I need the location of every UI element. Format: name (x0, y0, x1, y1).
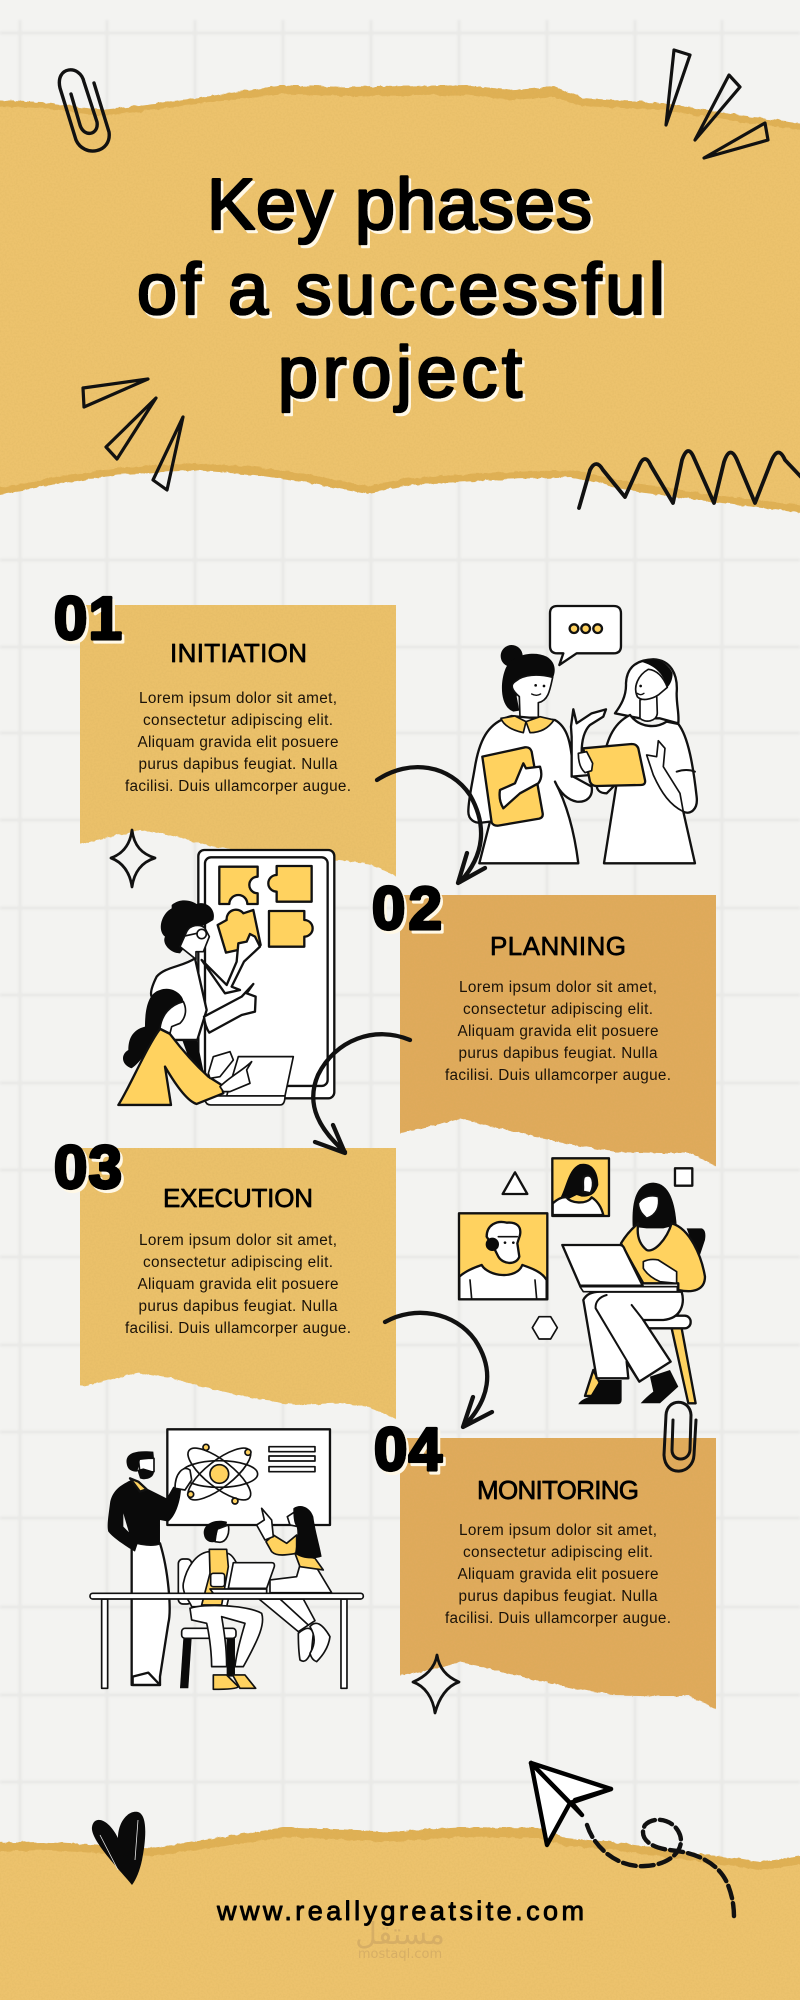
small portrait (552, 1158, 609, 1216)
arrow: execution to monitoring (385, 1313, 492, 1427)
body text: consectetur adipiscing elit. (463, 1544, 653, 1561)
body text: facilisi. Duis ullamcorper augue. (125, 778, 351, 795)
board (198, 850, 334, 1098)
arrow: planning to execution (313, 1034, 410, 1153)
top torn paper band (0, 85, 800, 514)
body text: facilisi. Duis ullamcorper augue. (445, 1610, 671, 1627)
seated man (183, 1521, 263, 1689)
arrow: initiation to planning (377, 767, 485, 883)
shapes (503, 1168, 692, 1339)
title: of a successful (137, 250, 665, 330)
icon: sparkle star (111, 830, 155, 887)
number 02: 02 (372, 875, 442, 942)
panel: initiation (80, 605, 396, 877)
watermark: mostaql.com (358, 1947, 442, 1962)
large portrait (459, 1213, 547, 1299)
seated woman (257, 1506, 332, 1662)
man with glasses (151, 900, 260, 1080)
panel: execution (80, 1148, 396, 1420)
illustration: video call woman (459, 1158, 705, 1404)
body text: purus dapibus feugiat. Nulla (458, 1588, 658, 1605)
heading: initiation: INITIATION (170, 638, 307, 668)
woman in yellow (118, 989, 252, 1105)
icon: paper plane (531, 1763, 611, 1845)
icon: spikes left (83, 379, 183, 490)
body text: purus dapibus feugiat. Nulla (138, 756, 338, 773)
laptop (210, 1563, 274, 1593)
seated chair (178, 1559, 236, 1688)
icon: paperclip on monitoring panel (664, 1402, 696, 1471)
speech bubble (550, 606, 621, 665)
body text (445, 1522, 671, 1627)
body text: consectetur adipiscing elit. (143, 1254, 333, 1271)
body text: Lorem ipsum dolor sit amet, (139, 1232, 337, 1249)
body text: purus dapibus feugiat. Nulla (458, 1045, 658, 1062)
title (137, 165, 665, 413)
number 03: 03 (54, 1134, 122, 1201)
panel: planning (400, 895, 716, 1166)
icon: heart (92, 1812, 145, 1885)
body text (125, 1232, 351, 1337)
woman at laptop (562, 1183, 705, 1404)
body text: facilisi. Duis ullamcorper augue. (125, 1320, 351, 1337)
icon: sparkle star bottom (413, 1655, 459, 1713)
number 04: 04 (374, 1416, 443, 1483)
icon: spikes top right (666, 50, 768, 158)
right woman (578, 659, 697, 863)
panel: monitoring (400, 1438, 716, 1710)
chair (585, 1228, 705, 1403)
body text: Lorem ipsum dolor sit amet, (459, 1522, 657, 1539)
body text: facilisi. Duis ullamcorper augue. (445, 1067, 671, 1084)
body text: Lorem ipsum dolor sit amet, (459, 979, 657, 996)
body text: Aliquam gravida elit posuere (458, 1566, 658, 1583)
body text: consectetur adipiscing elit. (463, 1001, 653, 1018)
body text: Lorem ipsum dolor sit amet, (139, 690, 337, 707)
table (90, 1593, 363, 1688)
website url: www.reallygreatsite.com (216, 1896, 584, 1926)
body text: Aliquam gravida elit posuere (138, 734, 338, 751)
heading: planning: PLANNING (490, 931, 626, 961)
icon: paperclip top (59, 70, 109, 151)
body text (125, 690, 351, 795)
standing man (108, 1451, 192, 1685)
body text: consectetur adipiscing elit. (143, 712, 333, 729)
icon: zigzag (579, 451, 800, 508)
illustration: two women talking (468, 606, 697, 863)
puzzle pieces (218, 866, 313, 953)
body text (445, 979, 671, 1084)
title: Key phases (207, 165, 592, 245)
illustration: team meeting (90, 1429, 363, 1689)
heading: execution: EXECUTION (163, 1183, 313, 1213)
left woman (468, 645, 606, 863)
bottom torn paper band (0, 1827, 800, 2000)
illustration: puzzle board team (118, 850, 334, 1105)
number 01: 01 (54, 585, 122, 652)
body text: purus dapibus feugiat. Nulla (138, 1298, 338, 1315)
laptop (205, 1057, 293, 1105)
body text: Aliquam gravida elit posuere (458, 1023, 658, 1040)
body text: Aliquam gravida elit posuere (138, 1276, 338, 1293)
title: project (278, 333, 522, 413)
heading: monitoring: MONITORING (477, 1475, 639, 1505)
watermark: مستقل (355, 1917, 445, 1952)
presentation board (167, 1429, 330, 1525)
dashed flight path (587, 1820, 734, 1918)
